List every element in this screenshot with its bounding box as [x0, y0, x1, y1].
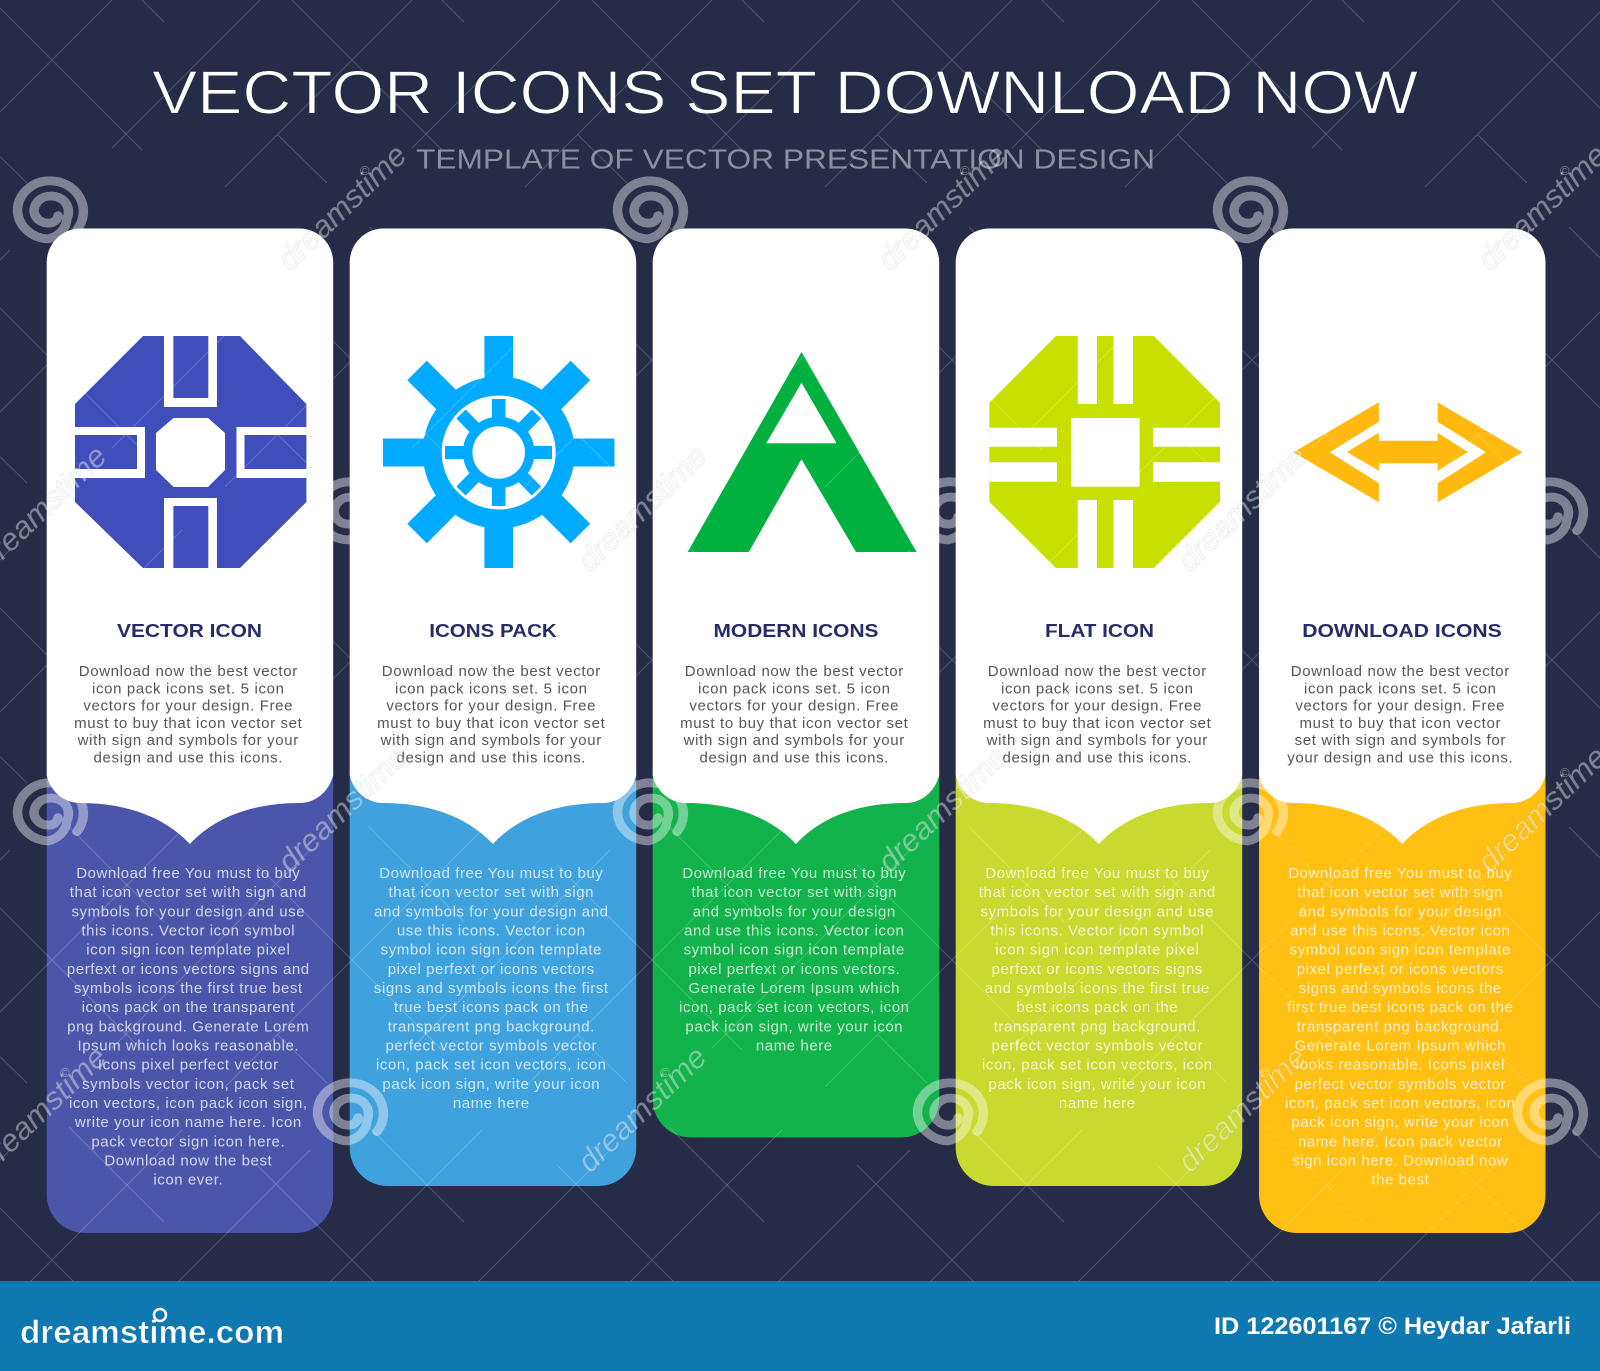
- watermark: dreamstime wordmarks: [0, 137, 1600, 1179]
- watermark: dreamstime wordmarks: dreamstime: [1171, 438, 1314, 578]
- description: design and use this icons.: [94, 750, 283, 766]
- long text: transparent png background.: [388, 1018, 595, 1035]
- long text: the best: [1371, 1172, 1430, 1189]
- heading: ICONS PACK: [429, 620, 557, 641]
- watermark: spirals: [18, 181, 1583, 1141]
- long text: Generate Lorem Ipsum which: [1295, 1038, 1506, 1054]
- long text: looks reasonable. Icons pixel: [1296, 1057, 1505, 1074]
- footer bar: [0, 1281, 1600, 1371]
- long text: symbol icon sign icon template: [684, 942, 905, 959]
- footer logo spiral: [154, 1309, 166, 1321]
- long text: that icon vector set with sign: [692, 884, 897, 901]
- long text: perfect vector symbols vector: [991, 1038, 1203, 1054]
- description: Download now the best vector: [988, 663, 1207, 680]
- long text: pack icon sign, write your icon: [1291, 1114, 1509, 1131]
- long text: Icons pixel perfect vector: [98, 1057, 279, 1074]
- long text: that icon vector set with sign: [389, 884, 594, 901]
- long text: Download free You must to buy: [379, 865, 603, 882]
- watermark: dreamstime wordmarks: ©: [1260, 1065, 1270, 1080]
- long text: pack icon sign, write your icon: [685, 1018, 903, 1035]
- description: must to buy that icon vector set: [377, 715, 606, 732]
- description: design and use this icons.: [397, 750, 586, 766]
- description: with sign and symbols for your: [683, 732, 905, 749]
- watermark: dreamstime wordmarks: dreamstime: [1171, 1039, 1314, 1179]
- description: with sign and symbols for your: [77, 732, 299, 749]
- long text: Ipsum which looks reasonable.: [77, 1038, 299, 1054]
- white upper card: [1259, 228, 1546, 844]
- long text: icons pack on the transparent: [82, 999, 295, 1016]
- long text: symbol icon sign icon template: [381, 942, 602, 959]
- watermark: dreamstime wordmarks: dreamstime: [271, 137, 414, 277]
- description: with sign and symbols for your: [380, 732, 602, 749]
- long text: symbol icon sign icon template: [1290, 942, 1511, 959]
- lower colored block: [47, 770, 333, 1233]
- long text: that icon vector set with sign and: [70, 884, 307, 901]
- lower colored block: [956, 770, 1242, 1186]
- watermark: dreamstime wordmarks: ©: [1260, 464, 1270, 479]
- long text: icon vectors, icon pack icon sign,: [69, 1095, 308, 1112]
- panel: vector icon: [47, 228, 333, 1233]
- description: vectors for your design. Free: [992, 698, 1202, 715]
- icon cut-outs: [989, 336, 1220, 568]
- long text: best icons pack on the: [1016, 999, 1178, 1016]
- long text: symbols icons the first true best: [74, 980, 303, 997]
- long text: sign icon here. Download now: [1292, 1152, 1508, 1170]
- icon inner bars: [75, 336, 306, 568]
- watermark: dreamstime wordmarks: dreamstime: [571, 1039, 714, 1179]
- description: must to buy that icon vector set: [74, 715, 303, 732]
- description: Download now the best vector: [685, 663, 904, 680]
- watermark: dreamstime wordmarks: ©: [1560, 765, 1570, 780]
- long text: transparent png background.: [1297, 1018, 1504, 1035]
- long text: Download free You must to buy: [682, 865, 906, 882]
- long text: and symbols for your design: [693, 903, 896, 920]
- long text: name here. Icon pack vector: [1298, 1133, 1503, 1150]
- heading: MODERN ICONS: [714, 620, 878, 641]
- long text: symbols for your design and use: [980, 903, 1214, 920]
- long text: pixel perfext or icons vectors.: [688, 961, 900, 978]
- watermark: dreamstime wordmarks: dreamstime: [871, 739, 1014, 879]
- description: your design and use this icons.: [1287, 750, 1513, 766]
- description: icon pack icons set. 5 icon: [395, 680, 588, 697]
- white upper card: [350, 228, 636, 844]
- long text: icon, pack set icon vectors, icon: [376, 1057, 607, 1074]
- long text: pack icon sign, write your icon: [988, 1076, 1206, 1093]
- watermark: dreamstime wordmarks: ©: [960, 163, 970, 178]
- long text: symbols for your design and use: [71, 903, 305, 920]
- title: VECTOR ICONS SET DOWNLOAD NOW: [152, 58, 1418, 126]
- long text: and symbols for your design: [1299, 903, 1502, 920]
- icon: gear within gear: [383, 336, 614, 568]
- description: must to buy that icon vector set: [680, 715, 909, 732]
- watermark: dreamstime wordmarks: dreamstime: [271, 739, 414, 879]
- long text: icon, pack set icon vectors, icon: [679, 999, 910, 1016]
- icon: octagon with cross channels: [75, 336, 306, 568]
- panel: flat icon: [956, 228, 1242, 1186]
- long text: pack icon sign, write your icon: [382, 1076, 600, 1093]
- description: icon pack icons set. 5 icon: [1304, 680, 1497, 697]
- long text: first true best icons pack on the: [1287, 999, 1514, 1016]
- long text: and symbols icons the first true: [985, 980, 1210, 997]
- footer background: [0, 1281, 1600, 1371]
- icon cut-outs: [75, 336, 306, 568]
- lower colored block: [350, 770, 636, 1186]
- description: icon pack icons set. 5 icon: [1001, 680, 1194, 697]
- long text: write your icon name here. Icon: [74, 1114, 302, 1131]
- long text: Download now the best: [104, 1152, 273, 1170]
- long text: perfext or icons vectors signs: [992, 961, 1203, 978]
- long text: and symbols for your design and: [374, 903, 609, 920]
- watermark: dreamstime wordmarks: ©: [960, 765, 970, 780]
- heading: VECTOR ICON: [117, 620, 262, 641]
- long text: this icons. Vector icon symbol: [990, 922, 1204, 940]
- description: vectors for your design. Free: [1295, 698, 1505, 715]
- long text: icon sign icon template pixel: [995, 942, 1199, 959]
- long text: icon ever.: [153, 1172, 223, 1189]
- watermark: dreamstime wordmarks: ©: [60, 464, 70, 479]
- description: Download now the best vector: [79, 663, 298, 680]
- long text: signs and symbols icons the first: [374, 980, 609, 997]
- white upper card: [47, 228, 333, 844]
- description: vectors for your design. Free: [689, 698, 899, 715]
- long text: perfext or icons vectors signs and: [67, 961, 310, 978]
- footer credit: ID 122601167 © Heydar Jafarli: [1214, 1313, 1571, 1340]
- long text: this icons. Vector icon symbol: [81, 922, 295, 940]
- long text: icon, pack set icon vectors, icon: [1285, 1095, 1516, 1112]
- long text: and use this icons. Vector icon: [684, 922, 904, 940]
- white upper card: [956, 228, 1242, 844]
- long text: Download free You must to buy: [76, 865, 300, 882]
- heading: DOWNLOAD ICONS: [1302, 620, 1502, 641]
- white upper card: [653, 228, 939, 844]
- long text: pack vector sign icon here.: [91, 1133, 285, 1150]
- long text: name here: [1059, 1095, 1136, 1112]
- panel: download icons: [1259, 228, 1546, 1233]
- lower colored block: [653, 770, 939, 1138]
- long text: perfect vector symbols vector: [385, 1038, 597, 1054]
- long text: perfect vector symbols vector: [1294, 1076, 1506, 1093]
- footer logo: dreamstime.com: [20, 1314, 284, 1350]
- long text: symbols vector icon, pack set: [82, 1076, 295, 1093]
- description: must to buy that icon vector: [1299, 715, 1501, 732]
- long text: signs and symbols icons the: [1299, 980, 1502, 997]
- watermark: dreamstime wordmarks: ©: [60, 1065, 70, 1080]
- icon: double arrow with chevrons: [1293, 402, 1522, 502]
- lower colored block: [1259, 770, 1546, 1233]
- description: must to buy that icon vector set: [983, 715, 1212, 732]
- description: with sign and symbols for your: [986, 732, 1208, 749]
- long text: Download free You must to buy: [1288, 865, 1512, 882]
- long text: use this icons. Vector icon: [397, 922, 586, 940]
- long text: pixel perfext or icons vectors: [1297, 961, 1504, 978]
- description: icon pack icons set. 5 icon: [698, 680, 891, 697]
- heading: FLAT ICON: [1045, 620, 1154, 641]
- icon: octagon with striped channels: [989, 336, 1220, 568]
- long text: Download free You must to buy: [985, 865, 1209, 882]
- description: vectors for your design. Free: [83, 698, 293, 715]
- watermark: dreamstime wordmarks: ©: [360, 765, 370, 780]
- watermark: dreamstime wordmarks: ©: [660, 464, 670, 479]
- description: Download now the best vector: [1291, 663, 1510, 680]
- description: set with sign and symbols for: [1295, 732, 1506, 749]
- long text: pixel perfext or icons vectors: [388, 961, 595, 978]
- description: design and use this icons.: [1003, 750, 1192, 766]
- long text: that icon vector set with sign: [1298, 884, 1503, 901]
- watermark: dreamstime wordmarks: ©: [1560, 163, 1570, 178]
- long text: true best icons pack on the: [394, 999, 589, 1016]
- panel: icons pack: [350, 228, 636, 1186]
- long text: transparent png background.: [994, 1018, 1201, 1035]
- watermark: dreamstime wordmarks: dreamstime: [571, 438, 714, 578]
- long text: icon, pack set icon vectors, icon: [982, 1057, 1213, 1074]
- panel: modern icons: [653, 228, 939, 1138]
- long text: name here: [756, 1038, 833, 1054]
- watermark: dreamstime wordmarks: ©: [660, 1065, 670, 1080]
- watermark: dreamstime wordmarks: dreamstime: [871, 137, 1014, 277]
- icon: letter A tent: [688, 352, 917, 552]
- long text: icon sign icon template pixel: [86, 942, 290, 959]
- long text: png background. Generate Lorem: [67, 1018, 309, 1035]
- long text: Generate Lorem Ipsum which: [689, 980, 900, 997]
- long text: name here: [453, 1095, 530, 1112]
- description: icon pack icons set. 5 icon: [92, 680, 285, 697]
- description: vectors for your design. Free: [386, 698, 596, 715]
- watermark: dreamstime wordmarks: ©: [360, 163, 370, 178]
- long text: and use this icons. Vector icon: [1290, 922, 1510, 940]
- description: design and use this icons.: [700, 750, 889, 766]
- description: Download now the best vector: [382, 663, 601, 680]
- long text: that icon vector set with sign and: [979, 884, 1216, 901]
- subtitle: TEMPLATE OF VECTOR PRESENTATION DESIGN: [416, 144, 1155, 174]
